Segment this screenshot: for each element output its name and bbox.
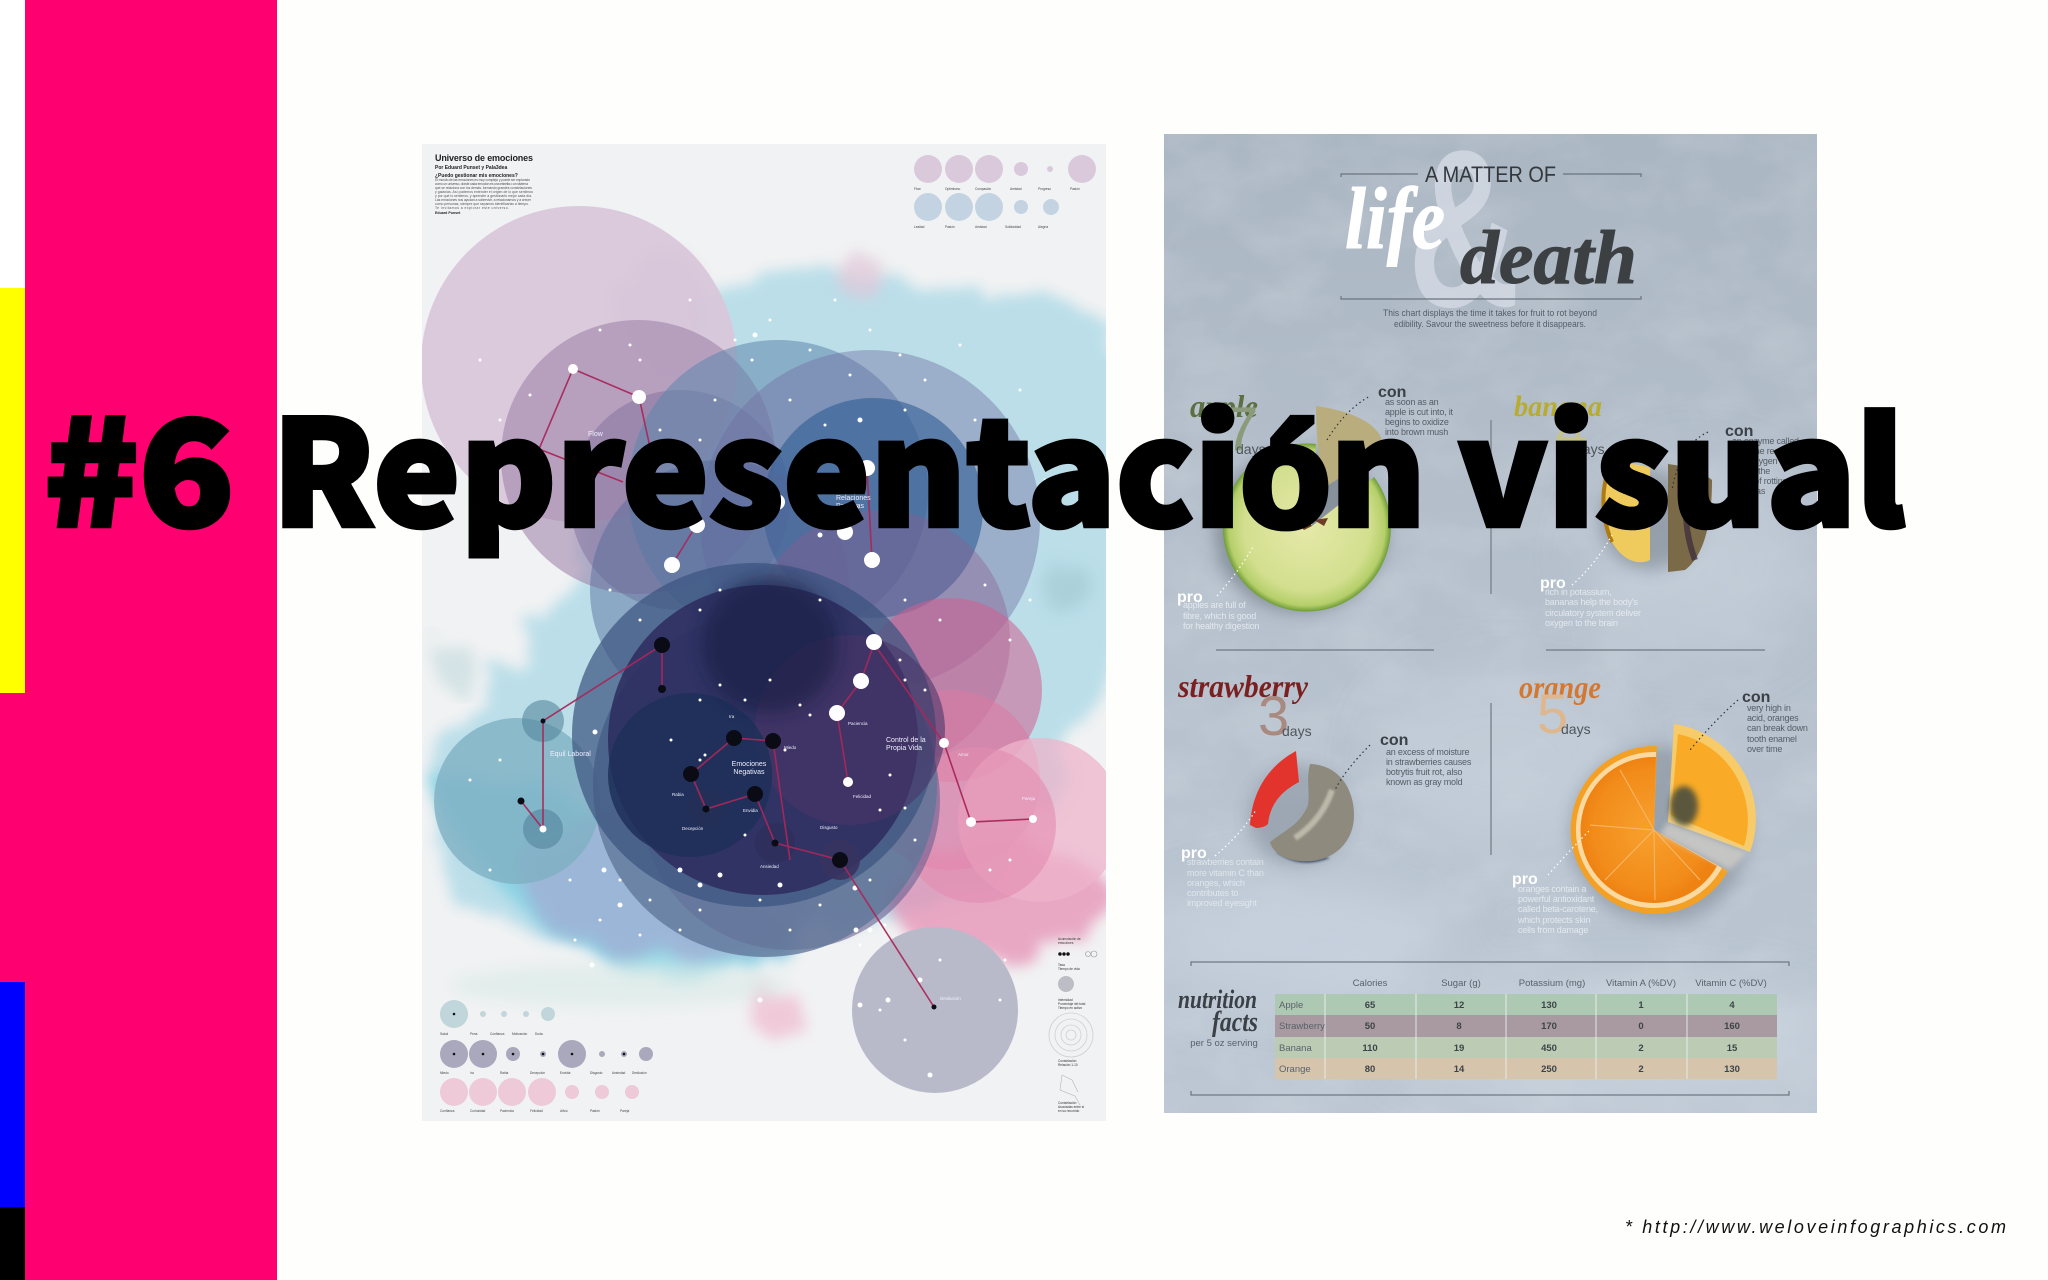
legend: bottom right key: Constelación [1058,1059,1077,1063]
fruit section: banana: circulatory system deliver [1545,608,1641,618]
legend: bottom right key: Relación 1-10 [1058,1063,1078,1067]
fruit section: banana: smell of rotting [1732,476,1788,486]
legend: bottom left circles: Pena [470,1032,478,1036]
fruit section: orange: cells from damage [1518,925,1588,935]
legend: bottom left circles: Rabia [500,1071,509,1075]
poster title block: como personas, siempre que sepamos identificarlas a tiempo. [435,202,529,206]
fruit section: strawberry: pro [1181,845,1207,862]
fruit section: banana: 4 [1555,398,1587,463]
legend: bottom left circles: Paciencia [500,1109,514,1113]
constellation labels: Flow [588,431,604,438]
fruit section: apple: apple [1190,388,1258,424]
legend: bottom right key: en su recorrido [1058,1109,1079,1113]
textured background [1150,134,1840,1113]
legend: top right circles: Amistad [975,225,987,229]
nutrition table: 80 [1365,1064,1375,1075]
constellation labels: Desilusión [940,996,961,1001]
large emotion circles [421,206,1122,1093]
source link: * http://www.weloveinfographics.com [1625,1217,2006,1237]
legend: bottom right key: Acumulación de [1058,937,1081,941]
legend: bottom left circles: Envidia [560,1071,571,1075]
legend: bottom right key: emociones [1058,941,1074,945]
poster title block: ¿Puedo gestionar mis emociones? [435,173,518,179]
heading: life: life [1345,171,1445,268]
constellation nodes: white [540,364,1037,832]
constellation labels: Control de la [886,737,926,744]
nutrition table: 15 [1727,1043,1738,1054]
fruit section: strawberry: days [1282,723,1312,739]
poster title block: como un universo, donde cada emoción es una estrella o un sistema [435,182,528,186]
nutrition table: Potassium (mg) [1519,978,1585,989]
fruit section: apple: for healthy digestion [1183,621,1260,631]
legend: top right circles: Progreso [1038,187,1051,191]
nutrition facts section [1178,962,1789,1095]
fruit section: banana: rich in potassium, [1545,587,1611,597]
fruit section: banana: ethylene reacts [1732,446,1791,456]
fruit section: strawberry: con [1380,732,1408,749]
constellation labels: Propia Vida [886,745,922,752]
fruit section: strawberry: in strawberries causes [1386,757,1472,767]
nutrition table [1275,978,1777,1079]
fruit section: banana: oxygen to the brain [1545,618,1618,628]
constellation nodes: black [518,637,936,1010]
legend: top right circles [914,155,1096,229]
fruit section: orange: con [1742,689,1770,706]
legend: bottom left circles: Felicidad [530,1109,543,1113]
poster title block: Universo de emociones [435,153,533,163]
fruit section: apple: apple is cut into, it [1385,407,1454,417]
constellation lines [521,369,1033,1007]
nutrition table: 250 [1541,1064,1557,1075]
fruit section: orange: over time [1747,744,1782,754]
legend: top right circles: Amistad [1010,187,1022,191]
legend: bottom left circles: Disgusto [590,1071,603,1075]
main title [44,358,1905,569]
poster title block: y por qué lo sentimos, y aprender a gestionarlo mejor cada día. [435,194,532,198]
heading: a matter of [1341,162,1641,187]
constellation labels: Ansiedad [760,864,779,869]
legend: top right circles: Lealtad [914,225,925,229]
legend: bottom right key: Porcentaje del total [1058,1002,1086,1006]
legend: bottom left circles: Pasión [590,1109,600,1113]
legend: top right circles: Pasión [945,225,955,229]
main title: #6 [44,358,234,569]
legend: bottom left circles: Salud [440,1032,448,1036]
nutrition table: Vitamin C (%DV) [1695,978,1767,989]
fruit section: orange: can break down [1747,723,1808,733]
legend: bottom left circles: Decepción [530,1071,545,1075]
nutrition table: Apple [1279,1000,1303,1011]
panel: universo de emociones poster [420,144,1122,1121]
fruit section: banana: create the [1732,466,1770,476]
intro text: edibility. Savour the sweetness before it disappears. [1394,319,1586,330]
fruit section: apple: into brown mush [1385,427,1448,437]
constellation labels: Emociones [732,761,767,768]
fruit section: orange: very high in [1747,703,1791,713]
legend: top right circles: Compasión [975,187,991,191]
constellation labels: Ira [729,714,735,719]
legend: bottom left circles: Ira [470,1071,474,1075]
nutrition table: 8 [1456,1021,1462,1032]
constellation labels: Disgusto [820,825,838,830]
nutrition table: Sugar (g) [1441,978,1481,989]
nutrition table: 12 [1454,1000,1464,1011]
legend: bottom right key: Tasa [1058,963,1065,967]
constellation labels: Negativas [733,769,765,776]
fruit section: strawberry: strawberries contain [1187,857,1264,867]
fruit section: apple: con [1378,384,1406,401]
fruit section: orange: acid, oranges [1747,713,1799,723]
constellation labels: Equil Laboral [550,751,591,758]
fruit section: banana: with oxygen to [1731,456,1787,466]
fruit section: banana: an enzyme called [1732,436,1799,446]
fruit section: orange: 5 [1537,682,1568,745]
nutrition table: Calories [1353,978,1388,989]
poster title block [435,153,533,215]
fruit section: orange: days [1561,721,1591,737]
nutrition table: 170 [1541,1021,1557,1032]
nutrition heading: per 5 oz serving [1190,1038,1258,1049]
sidebar: colour stripes [0,0,277,1280]
ampersand watermark: & [1408,102,1520,354]
nutrition table: 14 [1454,1064,1465,1075]
constellation labels [550,431,1036,1001]
nutrition table: 19 [1454,1043,1464,1054]
fruit section: strawberry: more vitamin C than [1187,868,1264,878]
fruit section: strawberry [1177,668,1472,908]
nutrition table: 110 [1362,1043,1378,1054]
legend: top right circles: Solidaridad [1005,225,1021,229]
constellation labels: Rabia [672,792,684,797]
legend: bottom left circles: Motivación [512,1032,527,1036]
nutrition table: 130 [1724,1064,1740,1075]
legend: bottom right key: Tiempo en activo [1058,1006,1082,1010]
fruit section: banana: banana [1514,390,1602,423]
poster title block: Te invitamos a explorar este universo. [435,206,509,210]
legend: bottom right key: Intensidad [1058,998,1073,1002]
panel: a matter of life & death poster [1150,102,1840,1113]
fruit section: apple: fibre, which is good [1183,611,1256,621]
constellation labels: Felicidad [853,794,872,799]
poster title block: y galaxias. Así podemos entender el origen de lo que sentimos [435,190,533,194]
nutrition table: 2 [1638,1064,1644,1075]
constellation labels: Envidia [743,808,758,813]
nutrition table: 50 [1365,1021,1375,1032]
fruit section: banana: days [1575,441,1605,457]
fruit section: strawberry: known as gray mold [1386,777,1463,787]
dividers [1216,420,1765,855]
legend: top right circles: Pasión [1070,187,1080,191]
fruit section: banana: bananas [1732,486,1766,496]
legend: bottom left circles: Pareja [620,1109,629,1113]
nutrition table: 4 [1729,1000,1735,1011]
poster title block: que se relaciona con los demás, formando grandes constelaciones [435,186,532,190]
heading: a matter of: A MATTER OF [1425,162,1556,187]
legend: bottom left circles: Desilusión [632,1071,647,1075]
fruit section: strawberry: contributes to [1187,888,1238,898]
fruit section: strawberry: 3 [1258,684,1289,747]
nutrition heading [1178,985,1258,1049]
fruit section: strawberry: oranges, which [1187,878,1245,888]
nutrition table: 160 [1724,1021,1740,1032]
nutrition table: Strawberry [1279,1021,1325,1032]
legend: bottom left circles: Confianza [490,1032,505,1036]
fruit section: apple [1177,384,1454,631]
fruit section: apple: pro [1177,589,1203,606]
fruit section: apple: apples are full of [1183,600,1246,610]
fruit section: banana: con [1725,423,1753,440]
fruit section: orange: pro [1512,871,1538,888]
nutrition table: 450 [1541,1043,1557,1054]
fruit section: strawberry: strawberry [1177,668,1309,704]
constellation labels: Decepción [682,826,704,831]
main title: visual [1458,358,1905,569]
nutrition table: Orange [1279,1064,1311,1075]
intro text: This chart displays the time it takes for fruit to rot beyond [1383,308,1597,319]
nutrition table: 0 [1638,1021,1644,1032]
fruit section: apple: days [1236,441,1266,457]
constellation labels: Relaciones [836,495,871,502]
legend: bottom left circles: Ansiedad [612,1071,626,1075]
constellation labels: Pareja [1022,796,1036,801]
fruit section: banana [1514,390,1799,628]
constellation labels: Amor [958,752,969,757]
nutrition heading: nutrition [1178,985,1257,1014]
legend: top right circles: Flow [914,187,921,191]
nutrition table: Banana [1279,1043,1312,1054]
fruit section: strawberry: improved eyesight [1187,898,1257,908]
fruit section: orange: orange [1519,669,1601,705]
legend: bottom right key [1049,937,1097,1113]
fruit section: apple: begins to oxidize [1385,417,1449,427]
main title: Representación [272,358,1426,569]
fruit section: banana: bananas help the body's [1545,597,1638,607]
poster title block: Las emociones nos ayudan a sobrevivir, a relacionarnos y a crecer [435,198,532,202]
legend: bottom left circles: Duda [535,1032,543,1036]
star field [470,300,1045,1075]
legend: bottom left circles: Curiosidad [470,1109,485,1113]
fruit section: orange: which protects skin [1517,915,1590,925]
legend: bottom right key: Tiempo de vida [1058,967,1080,971]
constellation labels: Paciencia [848,721,868,726]
nutrition table: Vitamin A (%DV) [1606,978,1676,989]
fruit section: apple: as soon as an [1385,397,1439,407]
legend: bottom left circles [440,1000,653,1113]
poster title block: El mundo de las emociones es muy complejo y puede ser explorado [435,178,530,182]
nutrition table: 130 [1541,1000,1557,1011]
nutrition table: 1 [1638,1000,1644,1011]
legend: top right circles: Alegría [1038,225,1048,229]
fruit section: orange: powerful antioxidant [1518,894,1595,904]
legend: bottom right key: Asociadas entre sí [1058,1105,1084,1109]
fruit section: orange: called beta-carotene, [1518,904,1598,914]
fruit section: apple: 7 [1224,395,1258,464]
heading: death: death [1460,216,1637,300]
constellation labels: Miedo [784,745,797,750]
fruit section: orange: oranges contain a [1518,884,1586,894]
legend: bottom left circles: Alivio [560,1109,568,1113]
intro text [1341,296,1641,330]
fruit section: orange [1512,669,1808,935]
poster title block: Por Eduard Punset y Pala3dea [435,165,507,171]
poster title block: Eduard Punset [435,211,461,215]
legend: bottom left circles: Miedo [440,1071,449,1075]
nutrition table: 2 [1638,1043,1644,1054]
fruit section: strawberry: an excess of moisture [1386,747,1470,757]
legend: bottom left circles: Confianza [440,1109,455,1113]
fruit section: strawberry: botrytis fruit rot, also [1386,767,1462,777]
watercolor background washes [420,250,1120,1038]
fruit section: orange: tooth enamel [1747,734,1797,744]
nutrition table: 65 [1365,1000,1376,1011]
legend: bottom right key: Constelación [1058,1101,1077,1105]
constellation labels: Positivas [836,503,865,510]
legend: top right circles: Optimismo [945,187,960,191]
nutrition heading: facts [1212,1007,1258,1038]
fruit section: banana: pro [1540,575,1566,592]
